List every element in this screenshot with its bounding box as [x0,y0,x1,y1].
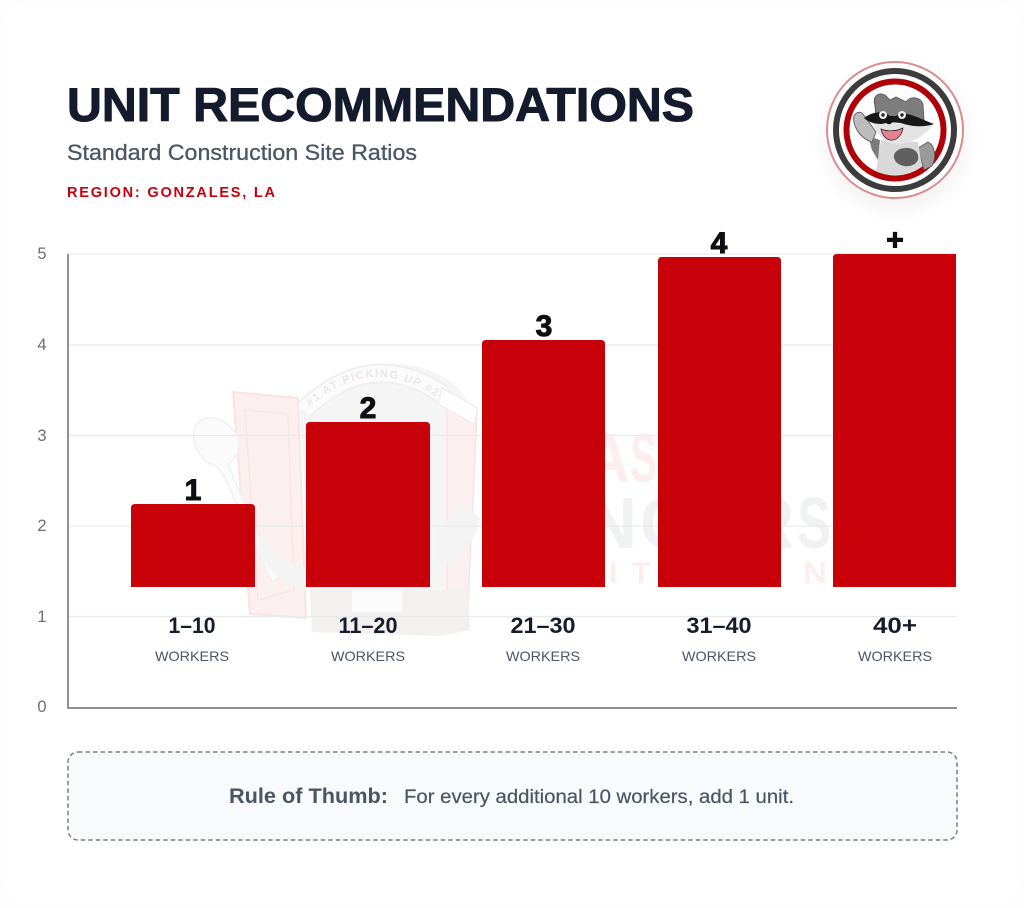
watermark logo: #1 AT PICKING UP #2 [307,370,439,406]
workers captions: WORKERS [858,648,932,664]
subtitle: Standard Construction Site Ratios [67,140,417,165]
watermark text: N [803,557,827,590]
bar: 1-10 workers [131,504,255,587]
y-axis labels: 0 [37,698,47,716]
workers captions: WORKERS [331,648,405,664]
rule of thumb callout: Rule of Thumb: [229,785,388,808]
bar value labels: 3 [536,310,552,343]
workers captions [155,648,932,664]
y-axis labels [37,245,47,716]
bar: 40+ workers [833,254,956,587]
watermark text: T [632,557,650,590]
bar value labels [185,224,904,507]
y-axis labels: 1 [37,608,47,626]
worker range labels [168,613,917,638]
region label: REGION: GONZALES, LA [67,185,276,201]
worker range labels: 21–30 [510,613,576,638]
y-axis labels: 2 [37,517,47,535]
bar: 31-40 workers [658,257,781,587]
y-axis labels: 3 [37,427,47,445]
rule of thumb callout [68,752,957,840]
bar: 11-20 workers [306,422,430,587]
workers captions: WORKERS [155,648,229,664]
title: UNIT RECOMMENDATIONS [67,78,694,131]
watermark text: N [586,484,637,564]
bar value labels: 2 [360,392,376,425]
y-axis labels: 5 [37,245,47,263]
watermark text: I [609,557,617,590]
icon: raccoon mascot [854,94,935,175]
watermark text: R [748,484,794,564]
bar value labels: 1 [185,474,201,507]
watermark text [585,419,831,590]
rule of thumb callout: For every additional 10 workers, add 1 unit. [404,787,794,808]
watermark text: S [630,419,657,497]
bar value labels: 4 [711,227,728,260]
bar value labels: + [886,224,904,257]
watermark text: C [640,484,690,564]
chart gridlines [68,254,957,616]
worker range labels: 11–20 [338,613,398,638]
worker range labels: 31–40 [686,613,752,638]
bar: 21-30 workers [482,340,605,587]
chart axes [68,254,957,708]
worker range labels: 40+ [873,613,917,638]
workers captions: WORKERS [682,648,756,664]
watermark text: A [585,419,630,497]
workers captions: WORKERS [506,648,580,664]
y-axis labels: 4 [37,336,47,354]
worker range labels: 1–10 [168,613,216,638]
watermark text: S [797,484,831,564]
watermark logo [193,364,480,636]
logo badge [812,58,980,222]
